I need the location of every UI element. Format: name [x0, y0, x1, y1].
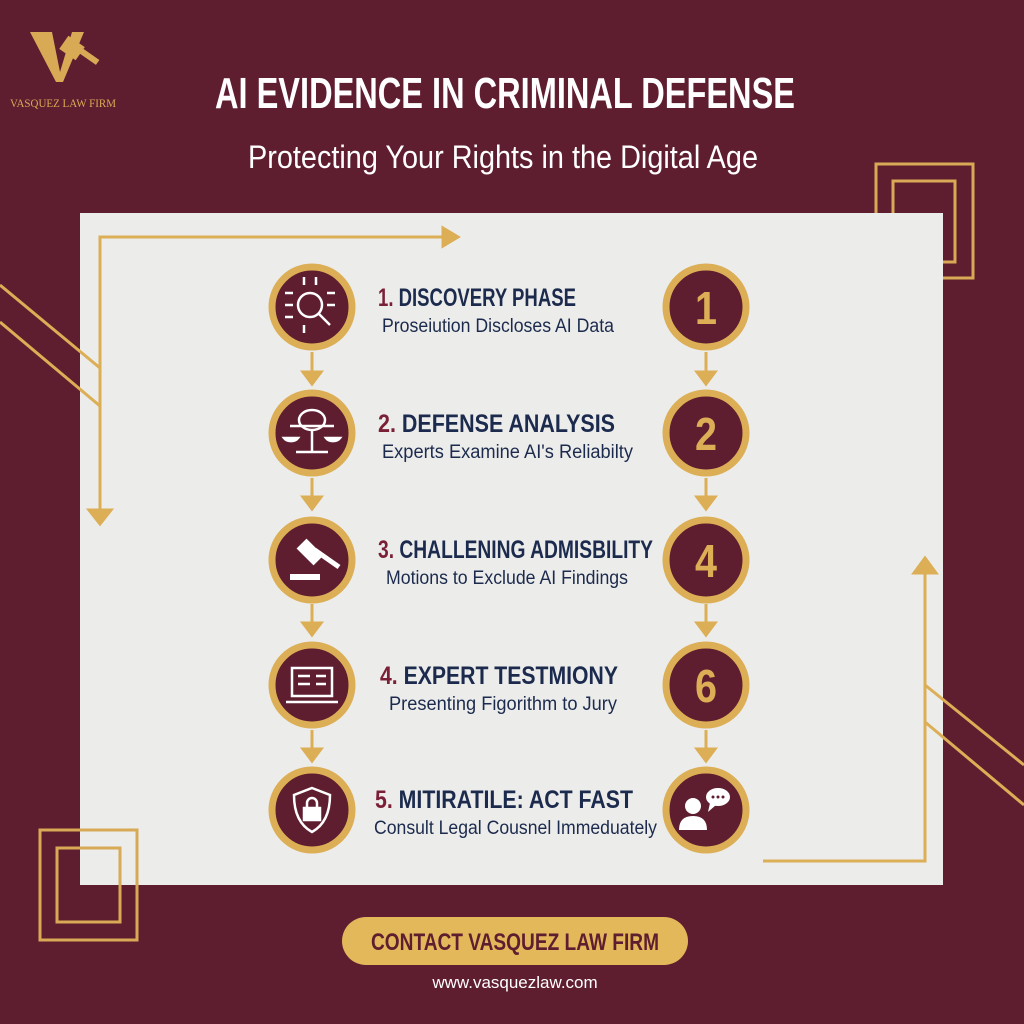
text: Consult Legal Cousnel Immeduately — [374, 818, 657, 839]
numbers: 2 — [695, 408, 717, 460]
logo — [10, 32, 116, 110]
CTA button: CONTACT VASQUEZ LAW FIRM — [371, 929, 659, 956]
icon: scales brain — [284, 410, 340, 452]
arrow lines right — [763, 558, 1024, 861]
icon: computer — [286, 668, 338, 702]
decorative squares top right — [876, 164, 973, 278]
step flow — [272, 267, 746, 850]
icon: shield lock — [294, 788, 330, 832]
step texts — [375, 284, 653, 814]
subtitle: Protecting Your Rights in the Digital Age — [248, 139, 758, 175]
step texts: 3. CHALLENING ADMISBILITY — [378, 536, 653, 564]
text: Presenting Figorithm to Jury — [389, 694, 617, 715]
logo: VASQUEZ LAW FIRM — [10, 96, 116, 110]
icon: gavel — [290, 539, 340, 580]
numbers: 4 — [695, 535, 717, 587]
step texts: 1. DISCOVERY PHASE — [378, 284, 576, 312]
step texts: 5. MITIRATILE: ACT FAST — [375, 786, 633, 814]
step texts: 2. DEFENSE ANALYSIS — [378, 410, 615, 438]
text: Proseiution Discloses AI Data — [382, 316, 614, 337]
numbers: 6 — [695, 660, 717, 712]
arrow lines left — [0, 228, 458, 524]
white panel — [80, 213, 943, 885]
icon: magnifier chip — [285, 277, 335, 333]
decorative squares bottom left — [40, 830, 137, 940]
step texts: 4. EXPERT TESTMIONY — [380, 662, 618, 690]
icon: person chat — [679, 788, 730, 830]
numbers: 1 — [695, 282, 717, 334]
numbers — [695, 282, 717, 712]
text: Experts Examine AI's Reliabilty — [382, 442, 633, 463]
url: www.vasquezlaw.com — [431, 973, 598, 992]
text: Motions to Exclude AI Findings — [386, 568, 628, 589]
CTA button — [342, 917, 688, 965]
title: AI EVIDENCE IN CRIMINAL DEFENSE — [215, 69, 795, 118]
